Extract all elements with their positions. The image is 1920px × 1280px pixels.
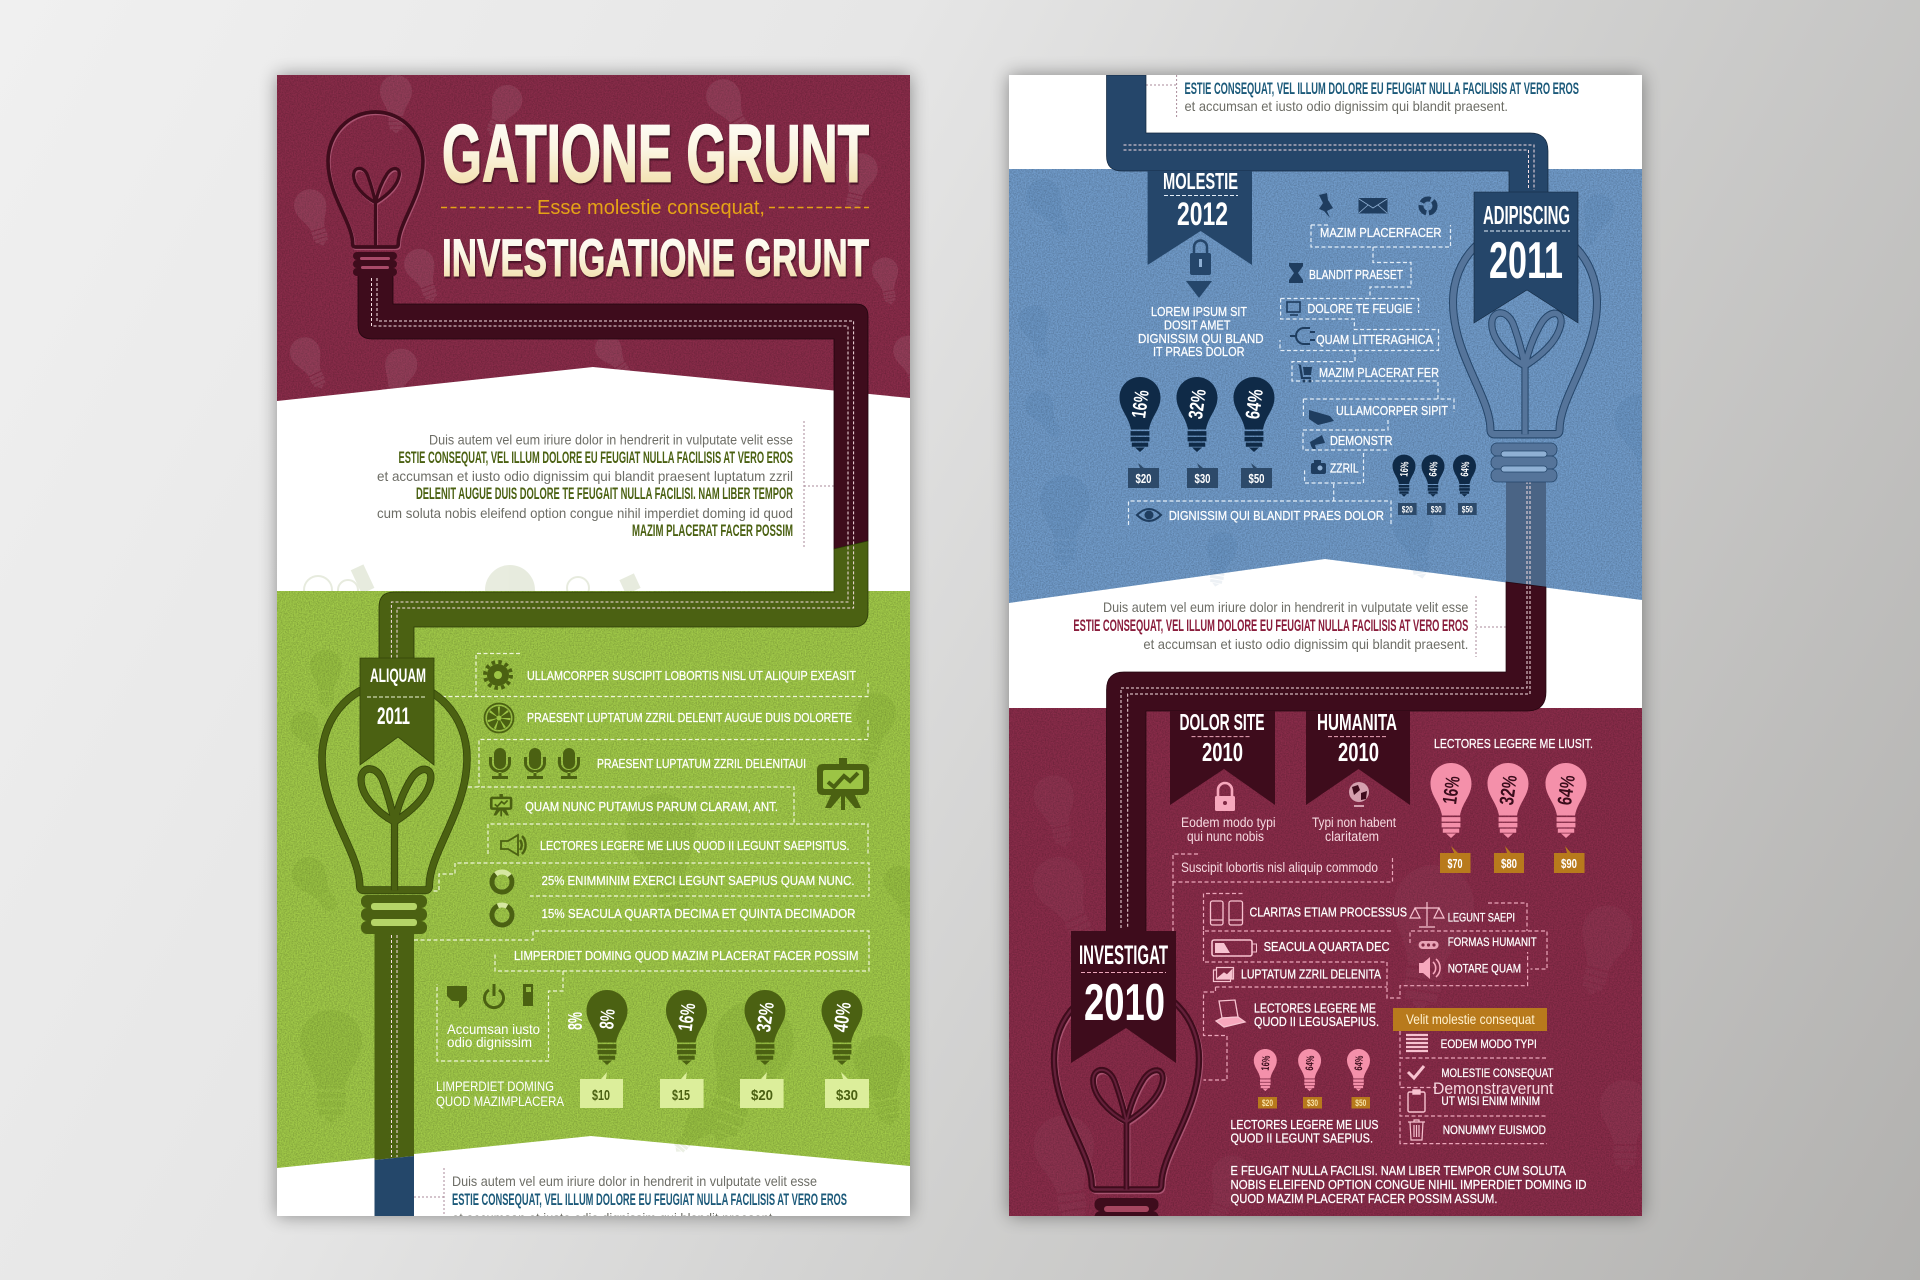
section: maroon header background (277, 75, 910, 401)
chart: green percentage bulbs: 16% (675, 1002, 700, 1033)
banner: humanita 2010: HUMANITA (1317, 709, 1397, 735)
title: GATIONE GRUNT (442, 108, 869, 200)
label: stray 8 percent: 8% (565, 1012, 587, 1030)
price tags: small gold: $20 (1262, 1098, 1273, 1108)
price tags: small dark blue (1398, 503, 1477, 515)
text block: right poster top (1184, 79, 1579, 114)
text block: lorem ipsum: LOREM IPSUM SIT (1151, 304, 1247, 319)
text block: typi non: claritatem (1325, 829, 1379, 844)
icon: top lightbulb (328, 112, 424, 248)
text block: left poster footer: Duis autem vel eum iriure dolor in hendrerit in vulputate velit esse (452, 1173, 817, 1189)
ghost bulbs on maroon (1025, 772, 1650, 1232)
text: suscipit: Suscipit lobortis nisl aliquip commodo (1181, 860, 1378, 875)
text block: left poster footer (452, 1173, 847, 1226)
icon: megaphone (1310, 435, 1325, 449)
price tags: small dark blue: $20 (1402, 504, 1413, 514)
icon: padlock (1190, 240, 1211, 275)
price tags: dark blue (1128, 463, 1272, 488)
text block: eodem: Eodem modo typi (1181, 815, 1276, 830)
text block: intro paragraph (377, 432, 793, 540)
banner: humanita 2010 (1306, 709, 1410, 805)
text block: e feugait: E FEUGAIT NULLA FACILISI. NAM LIBER TEMPOR CUM SOLUTA (1230, 1163, 1566, 1178)
list: maroon right lower: EODEM MODO TYPI (1441, 1037, 1537, 1051)
chart: dark blue bulbs: 16% (1128, 389, 1154, 420)
icon: eye (1137, 509, 1161, 521)
list: maroon left column: LECTORES LEGERE ME (1254, 1000, 1376, 1015)
chart: green percentage bulbs (586, 990, 862, 1065)
price tags: small gold: $50 (1355, 1098, 1366, 1108)
subtitle: Esse molestie consequat, (537, 197, 765, 219)
list: blue labels: ULLAMCORPER SIPIT (1336, 403, 1448, 418)
banner: dolor site 2010 (1170, 709, 1275, 805)
list: maroon right upper: NOTARE QUAM (1448, 962, 1521, 976)
text block: right poster top: et accumsan et iusto odio dignissim qui blandit praesent. (1184, 98, 1508, 114)
text block: intro paragraph: et accumsan et iusto odio dignissim qui blandit praesent luptatum zzril (377, 468, 793, 484)
list: blue labels: BLANDIT PRAESET (1309, 267, 1403, 282)
chart: pink bulbs: 64% (1554, 774, 1580, 807)
text block: e feugait (1230, 1163, 1586, 1206)
price tags: green: $20 (751, 1087, 773, 1104)
chart: small dark blue bulbs: 64% (1459, 461, 1472, 477)
icon: calculator (1309, 410, 1334, 425)
pipe: maroon run (1106, 582, 1546, 935)
pipe: blue run (1106, 75, 1548, 195)
ghost bulbs on green (285, 650, 923, 1161)
icon: plug (1290, 328, 1315, 344)
list: maroon right upper: FORMAS HUMANIT (1448, 935, 1537, 949)
icon: trash can (1408, 1120, 1425, 1140)
icon: gear (485, 662, 511, 688)
text block: accumsan: Accumsan iusto (447, 1021, 540, 1037)
text block: blue section paragraph: ESTIE CONSEQUAT, VEL ILLUM DOLORE EU FEUGIAT NULLA FACILISIS AT VERO EROS (1073, 616, 1468, 635)
panel: left poster (277, 73, 933, 1226)
text block: typi non (1312, 815, 1396, 844)
banner: molestie 2012 (1148, 168, 1252, 265)
banner: molestie 2012: MOLESTIE (1163, 168, 1238, 194)
price tags: dark blue: $20 (1136, 471, 1152, 486)
chart: pink bulbs: 32% (1496, 774, 1522, 807)
callout: velit molestie (1393, 1008, 1547, 1031)
icon: large green bulb (322, 682, 467, 890)
price tags: gold (1440, 846, 1584, 873)
icon: blue bulb (1453, 226, 1597, 434)
text block: intro paragraph: MAZIM PLACERAT FACER POSSIM (632, 521, 793, 540)
icon: progress ring 15 (488, 901, 516, 929)
icon row: pin, envelope, recycle (1319, 193, 1435, 218)
chart: green percentage bulbs: 8% (596, 1008, 620, 1030)
icon: top bulb screw (353, 252, 397, 276)
icon: speaker pink (1419, 957, 1440, 979)
chart: small pink bulbs (1254, 1049, 1370, 1091)
price tags: small gold: $30 (1307, 1098, 1318, 1108)
list row: microphones: PRAESENT LUPTATUM ZZRIL DELENITAUI (597, 756, 806, 771)
icon: camera (1311, 460, 1326, 474)
chart: dark blue bulbs: 32% (1185, 388, 1211, 421)
text block: left poster footer: ESTIE CONSEQUAT, VEL ILLUM DOLORE EU FEUGIAT NULLA FACILISIS AT VERO EROS (452, 1190, 847, 1209)
chart: small pink bulbs: 16% (1260, 1055, 1273, 1071)
price tags: green: $30 (836, 1087, 858, 1104)
connector dashes: green list (414, 654, 869, 1061)
banner: molestie 2012: 2012 (1177, 196, 1228, 232)
list row: limperdiet: LIMPERDIET DOMING QUOD MAZIM PLACERAT FACER POSSIM (514, 948, 858, 963)
text block: intro paragraph: DELENIT AUGUE DUIS DOLORE TE FEUGAIT NULLA FACILISI. NAM LIBER TEMPOR (416, 484, 793, 503)
chart: green percentage bulbs: 32% (753, 1001, 779, 1034)
text block: right poster top: ESTIE CONSEQUAT, VEL ILLUM DOLORE EU FEUGIAT NULLA FACILISIS AT VERO EROS (1184, 79, 1579, 98)
ghost bulbs on maroon header (290, 75, 910, 389)
ghost bulbs above green section (303, 564, 640, 591)
icon: globe (1349, 782, 1369, 806)
banner: investigat 2010 (1071, 931, 1176, 1063)
icon: pictures (1214, 968, 1234, 982)
dotted note line, bottom paragraph (414, 1168, 444, 1216)
icon: stacked lines (1406, 1035, 1428, 1051)
icon: three microphones (489, 748, 580, 779)
text block: lorem ipsum (1138, 304, 1264, 359)
banner: humanita 2010: 2010 (1338, 737, 1379, 767)
text block: accumsan: odio dignissim (447, 1034, 532, 1050)
banner: aliquam 2011: 2011 (377, 703, 410, 730)
list: maroon right lower: NONUMMY EUISMOD (1443, 1123, 1546, 1137)
list: maroon right lower: Demonstraverunt (1433, 1079, 1554, 1098)
dotted note line, blue paragraph (1476, 596, 1506, 657)
icon: laptop (1216, 1000, 1245, 1027)
icon: battery (1212, 940, 1256, 956)
heading: second title line: INVESTIGATIONE GRUNT (442, 229, 869, 288)
banner: adipiscing 2011: 2011 (1489, 232, 1563, 290)
list: maroon left column: LUPTATUM ZZRIL DELENITA (1241, 967, 1381, 982)
banner: adipiscing 2011 (1474, 192, 1578, 323)
text block: lectores legere (1230, 1117, 1379, 1146)
list row: speaker (501, 835, 850, 855)
icon: blue bulb screw (1491, 443, 1557, 482)
list: blue labels: QUAM LITTERAGHICA (1316, 332, 1433, 347)
banner: dolor site 2010: 2010 (1202, 737, 1243, 767)
list: blue labels: ZZRIL (1330, 461, 1359, 476)
list row: fan (484, 704, 852, 732)
icon: monitor (1287, 302, 1300, 315)
icon: down triangle (1186, 281, 1212, 298)
section: blue background (1009, 169, 1642, 603)
list: blue labels: DIGNISSIM QUI BLANDIT PRAES DOLOR (1169, 508, 1384, 523)
icon: small presentation board (490, 794, 512, 816)
text block: blue section paragraph: Duis autem vel eum iriure dolor in hendrerit in vulputate velit esse (1103, 599, 1469, 615)
icon: fan (484, 704, 514, 732)
text block: eodem: qui nunc nobis (1187, 829, 1264, 844)
list: maroon right lower: UT WISI ENIM MINIM (1441, 1094, 1540, 1108)
pipe stitching (372, 278, 854, 1157)
list row: microphones (489, 748, 806, 779)
heading: lectores: LECTORES LEGERE ME LIUSIT. (1434, 736, 1593, 751)
price tags: small dark blue: $30 (1431, 504, 1442, 514)
text block: accumsan (447, 1021, 540, 1050)
icon: phones (1210, 901, 1242, 925)
list row: speaker: LECTORES LEGERE ME LIUS QUOD II LEGUNT SAEPISITUS. (540, 838, 850, 853)
icon: investigat bulb screw (1094, 1198, 1158, 1224)
pipe: maroon upper run (358, 270, 868, 549)
text block: blue section paragraph: et accumsan et iusto odio dignissim qui blandit praesent. (1143, 636, 1468, 652)
ghost bulbs on blue (1015, 173, 1678, 589)
price tags: small gold (1258, 1097, 1370, 1108)
banner: adipiscing 2011: ADIPISCING (1483, 200, 1570, 230)
price tags: gold: $80 (1501, 856, 1517, 871)
icon: check mark (1408, 1066, 1424, 1078)
text block: eodem (1181, 815, 1276, 844)
list row: 25 percent (488, 868, 854, 896)
list row: 25 percent: 25% ENIMMINIM EXERCI LEGUNT SAEPIUS QUAM NUNC. (542, 873, 854, 888)
list: blue labels: MAZIM PLACERFACER (1320, 225, 1442, 240)
banner: dolor site 2010: DOLOR SITE (1180, 709, 1264, 735)
text block: e feugait: QUOD MAZIM PLACERAT FACER POSSIM ASSUM. (1230, 1191, 1498, 1206)
chart: small dark blue bulbs: 16% (1398, 461, 1412, 477)
banner: investigat 2010: 2010 (1084, 974, 1165, 1032)
list: maroon right upper (1410, 902, 1537, 979)
list: maroon left column: SEACULA QUARTA DEC (1264, 939, 1390, 954)
icon: clipboard (1408, 1090, 1425, 1112)
banner: investigat 2010: INVESTIGAT (1079, 940, 1168, 970)
price tags: dark blue: $30 (1194, 471, 1210, 486)
text block: lectores legere: LECTORES LEGERE ME LIUS (1230, 1117, 1379, 1132)
text block: lorem ipsum: IT PRAES DOLOR (1153, 344, 1244, 359)
chart: small pink bulbs: 64% (1304, 1055, 1317, 1071)
section: maroon background (1009, 708, 1642, 1216)
icon group: thumb, power, switch (447, 984, 533, 1008)
text block: limperdiet label (436, 1078, 565, 1109)
list row: fan: PRAESENT LUPTATUM ZZRIL DELENIT AUGUE DUIS DOLORETE (527, 710, 852, 725)
icon: pill (1419, 941, 1439, 949)
list: maroon right lower (1406, 1035, 1554, 1140)
dotted note line, top paragraph (1146, 75, 1177, 118)
poster shadows (277, 75, 1642, 1216)
text block: limperdiet label: LIMPERDIET DOMING (436, 1078, 554, 1094)
banner: aliquam 2011 (360, 658, 434, 765)
list: maroon left column: CLARITAS ETIAM PROCESSUS (1250, 905, 1407, 920)
text block: intro paragraph: Duis autem vel eum iriure dolor in hendrerit in vulputate velit esse (429, 432, 793, 448)
icon: hourglass (1289, 263, 1303, 283)
price tags: gold: $70 (1448, 856, 1462, 871)
connector dashes: maroon list (1173, 854, 1547, 1144)
chart: small dark blue bulbs (1392, 455, 1476, 497)
list row: 15 percent (488, 901, 856, 929)
icon: speaker (501, 835, 526, 855)
icon: large presentation board (817, 758, 869, 810)
text block: lectores legere: QUOD II LEGUNT SAEPIUS. (1230, 1130, 1373, 1146)
list: blue labels (1137, 225, 1448, 523)
section: green background (277, 591, 910, 1168)
list: blue labels: DEMONSTR (1330, 433, 1392, 448)
icon: progress ring 25 (488, 868, 516, 896)
chart: pink bulbs: 16% (1439, 775, 1465, 806)
pipe: green lower stem (374, 930, 414, 1160)
chart: pink bulbs (1430, 763, 1586, 838)
text block: typi non: Typi non habent (1312, 815, 1396, 830)
list: blue labels: MAZIM PLACERAT FER (1319, 365, 1439, 380)
price tags: green (580, 1072, 869, 1108)
icon: investigat bulb (1054, 984, 1200, 1191)
price tags: gold: $90 (1561, 856, 1577, 871)
callout: velit molestie: Velit molestie consequat (1406, 1012, 1535, 1027)
text block: left poster footer: et accumsan et iusto odio dignissim qui blandit praesent. (452, 1210, 776, 1226)
icon: scales (1410, 902, 1444, 927)
dotted note line, first paragraph (804, 421, 834, 549)
panel: right poster (1009, 75, 1678, 1232)
pipe stitching, blue and maroon (1121, 145, 1534, 928)
chart: dark blue bulbs: 64% (1242, 388, 1268, 421)
text block: blue section paragraph (1073, 599, 1469, 652)
pipe: blue stem (374, 1156, 414, 1216)
chart: green percentage bulbs: 40% (830, 1001, 856, 1034)
pipe: green run (379, 541, 868, 660)
list row: presentation: QUAM NUNC PUTAMUS PARUM CLARAM, ANT. (525, 799, 778, 814)
chart: small dark blue bulbs: 64% (1427, 461, 1441, 477)
list row: 15 percent: 15% SEACULA QUARTA DECIMA ET QUINTA DECIMADOR (542, 906, 856, 921)
list: maroon left column (1210, 901, 1407, 1029)
list row: gear: ULLAMCORPER SUSCIPIT LOBORTIS NISL UT ALIQUIP EXEASIT (527, 668, 856, 683)
text block: limperdiet label: QUOD MAZIMPLACERA (436, 1093, 565, 1109)
list: maroon right upper: LEGUNT SAEPI (1448, 910, 1515, 924)
price tags: green: $10 (592, 1087, 610, 1104)
price tags: green: $15 (672, 1087, 690, 1104)
list: blue labels: DOLORE TE FEUGIE (1308, 301, 1413, 316)
text block: e feugait: NOBIS ELEIFEND OPTION CONGUE NIHIL IMPERDIET DOMING ID (1230, 1177, 1586, 1192)
banner: aliquam 2011: ALIQUAM (370, 666, 426, 687)
price tags: dark blue: $50 (1248, 471, 1264, 486)
text block: intro paragraph: cum soluta nobis eleifend option congue nihil imperdiet doming id quod (377, 505, 793, 521)
text block: lorem ipsum: DOSIT AMET (1164, 318, 1231, 332)
list: maroon right lower: MOLESTIE CONSEQUAT (1441, 1066, 1554, 1080)
list: maroon left column: QUOD II LEGUSAEPIUS. (1254, 1014, 1379, 1029)
icon: green bulb screw (361, 895, 427, 934)
text block: intro paragraph: ESTIE CONSEQUAT, VEL ILLUM DOLORE EU FEUGIAT NULLA FACILISIS AT VERO EROS (398, 448, 793, 467)
icon: shopping cart (1298, 364, 1312, 382)
price tags: small dark blue: $50 (1462, 504, 1473, 514)
pipe: blue semi-transparent stem (1506, 478, 1546, 587)
chart: small pink bulbs: 64% (1353, 1055, 1366, 1071)
list row: presentation (490, 794, 778, 816)
chart: dark blue bulbs (1120, 377, 1274, 452)
list row: gear (485, 662, 856, 688)
connector dashes: blue list (1128, 225, 1454, 525)
text block: lorem ipsum: DIGNISSIM QUI BLAND (1138, 331, 1264, 346)
icon: pink padlock (1215, 783, 1235, 811)
